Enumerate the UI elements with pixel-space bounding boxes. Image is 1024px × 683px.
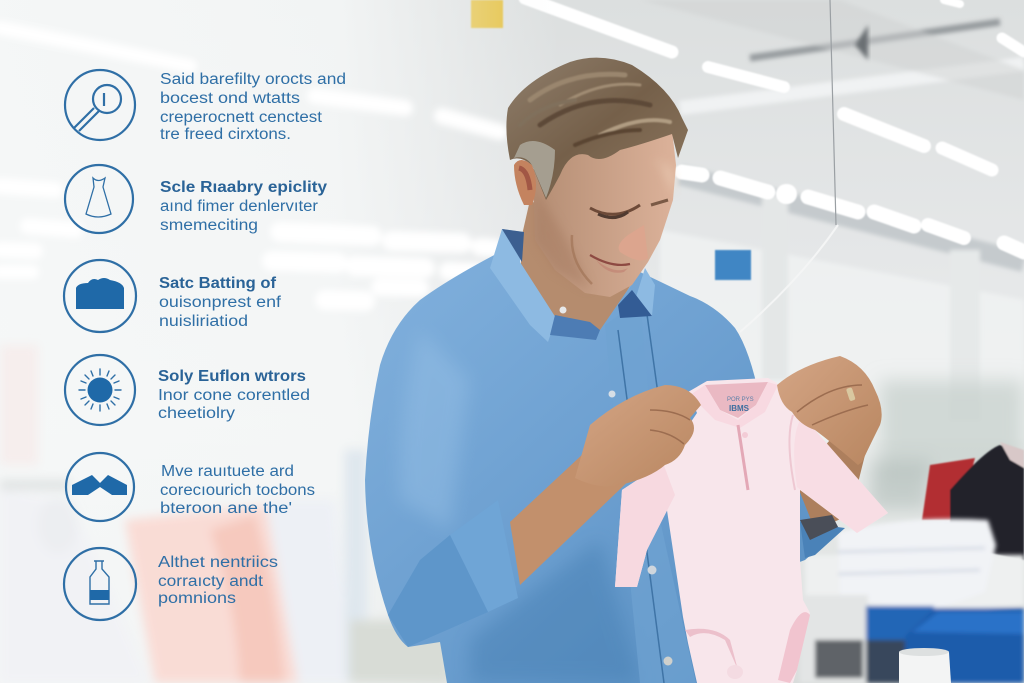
table and towels xyxy=(800,519,1024,683)
chest shading xyxy=(470,540,640,683)
nose xyxy=(619,225,648,260)
icon: bottle xyxy=(64,548,136,620)
white veil over the left side xyxy=(0,0,560,683)
text block 4 xyxy=(158,368,310,422)
hair xyxy=(506,58,688,200)
list item 3 xyxy=(64,260,282,332)
text block 3: Satc Batting of xyxy=(159,275,277,292)
man holding the onesie xyxy=(365,58,888,683)
left hand xyxy=(575,385,701,486)
text block 4: Inor cone corentled xyxy=(158,387,310,404)
text block 5: bteroon ane the' xyxy=(160,500,292,517)
text block 6: corraıcty andt xyxy=(158,573,264,590)
collar xyxy=(490,229,556,342)
eye and brow xyxy=(590,205,640,214)
sleeve highlight xyxy=(399,330,470,530)
red and black garments xyxy=(922,442,1024,560)
icon: sun xyxy=(65,355,135,425)
text block 2: aınd fimer denlervıter xyxy=(160,198,318,215)
onesie xyxy=(615,378,888,683)
list item 2 xyxy=(65,165,327,234)
right hand xyxy=(777,356,882,465)
mouth xyxy=(590,255,630,265)
text block 6 xyxy=(158,554,278,607)
cuff xyxy=(450,500,518,612)
face xyxy=(533,120,676,297)
list item 4 xyxy=(65,355,310,425)
text block 6: pomnions xyxy=(158,590,236,607)
text block 5: corecıourich tocbons xyxy=(160,482,315,499)
left forearm xyxy=(510,438,640,585)
text block 4: Soly Euflon wtrors xyxy=(158,368,306,385)
text block 3: nuisliriatiod xyxy=(159,313,248,330)
icon: double peak xyxy=(66,453,134,521)
ear xyxy=(514,160,536,205)
text block 6: Althet nentriics xyxy=(158,554,278,571)
text block 1: creperocnett cenctest xyxy=(160,109,323,126)
placket xyxy=(605,300,696,683)
text block 1: tre freed cirxtons. xyxy=(160,126,291,143)
white cup xyxy=(899,652,951,683)
text block 1: Said barefilty orocts and xyxy=(160,71,346,88)
left side hanging garments xyxy=(0,345,450,683)
text block 3: ouisonprest enf xyxy=(159,294,282,311)
list item 5 xyxy=(66,453,315,521)
onesie: IBMS xyxy=(729,404,750,413)
right sleeve end xyxy=(800,522,845,558)
text block 3 xyxy=(159,275,282,330)
text block 5 xyxy=(160,463,315,517)
list item 1 xyxy=(65,70,346,143)
text block 2: Scle Rıaabry epiclity xyxy=(160,179,327,196)
text block 2: smemeciting xyxy=(160,217,258,234)
icon: dress xyxy=(65,165,133,233)
neck xyxy=(520,200,640,335)
text block 2 xyxy=(160,179,327,234)
text block 1 xyxy=(160,71,346,143)
buttons xyxy=(608,390,616,398)
right arm behind onesie xyxy=(795,440,865,530)
text block 5: Mve rauıtuete ard xyxy=(161,463,294,480)
icon: magnifier xyxy=(65,70,135,140)
icon: solid block xyxy=(64,260,136,332)
text block 4: cheetiolry xyxy=(158,405,235,422)
neck label text: POR PYS xyxy=(727,397,754,403)
cheek shade xyxy=(535,190,590,290)
list item 6 xyxy=(64,548,278,620)
text block 1: bocest ond wtatts xyxy=(160,90,300,107)
shirt torso and arm xyxy=(365,252,845,683)
